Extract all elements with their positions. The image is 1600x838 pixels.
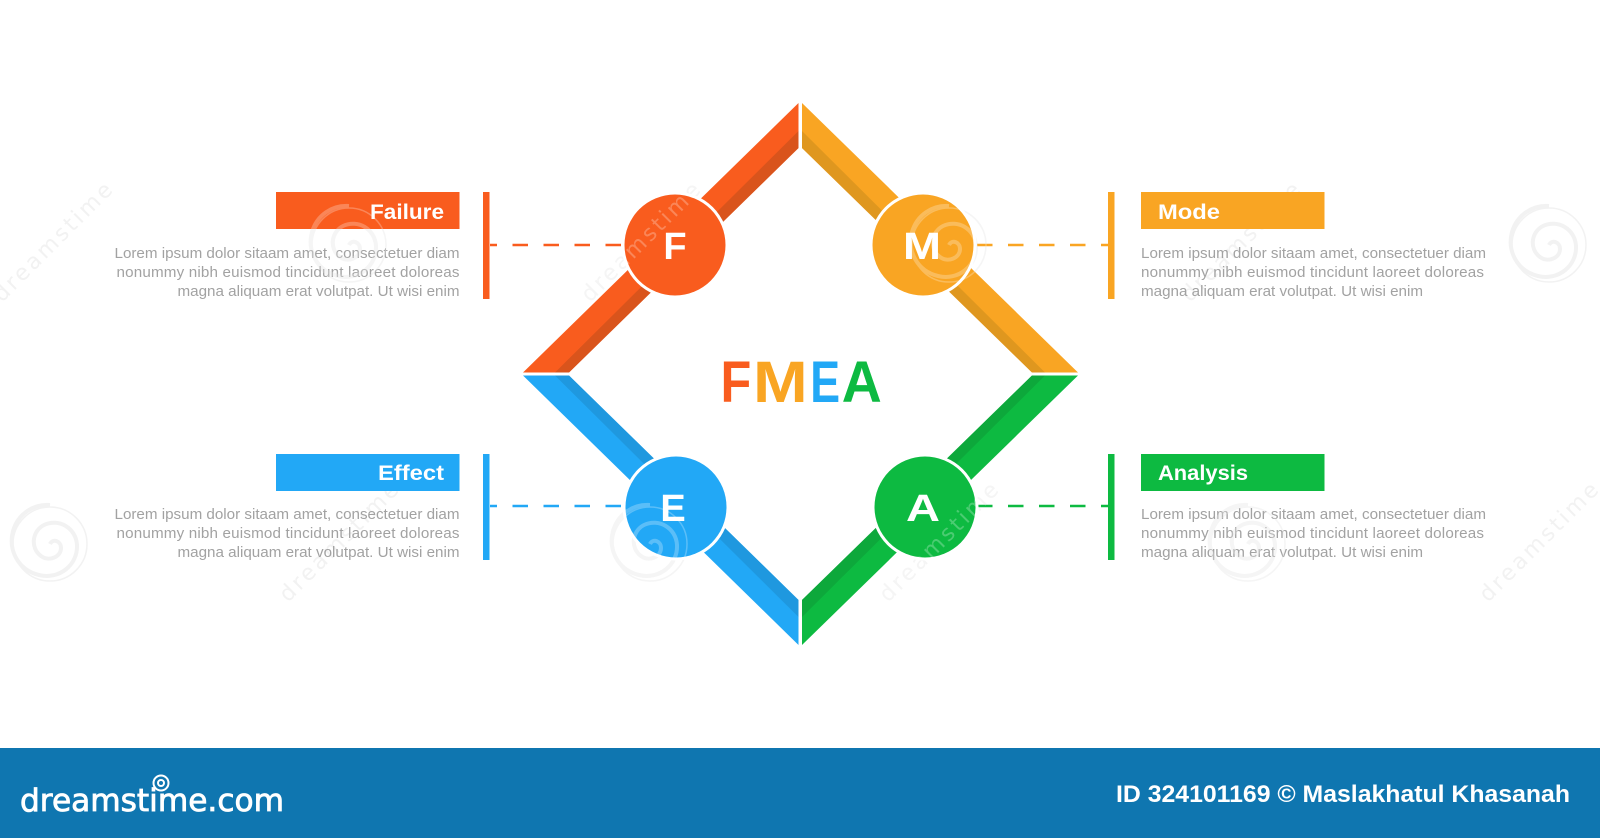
footer bar [0, 748, 1600, 838]
heading: analysis [1141, 454, 1324, 491]
title: FMEA: F [720, 350, 751, 415]
text: failure [114, 245, 460, 300]
text: effect: nonummy nibh euismod tincidunt laoreet doloreas [116, 525, 460, 542]
text: mode: nonummy nibh euismod tincidunt laoreet doloreas [1141, 264, 1484, 281]
icon: spiral [154, 776, 168, 790]
watermark layer over colour: dreamstime [875, 478, 1004, 607]
segment: mode [802, 103, 1078, 372]
circle: F: F [663, 226, 687, 268]
block: analysis [1141, 454, 1486, 561]
segment: failure [523, 103, 798, 372]
watermark layer over colour [311, 178, 1285, 607]
heading: effect [276, 454, 460, 491]
watermark layer on white: dreamstime [577, 178, 706, 307]
text: failure: nonummy nibh euismod tincidunt laoreet doloreas [116, 264, 460, 281]
connector: mode [976, 192, 1114, 299]
circle: M [870, 192, 976, 298]
circle: E: E [660, 488, 686, 530]
watermark layer on white: dreamstime [275, 478, 404, 607]
circle: A [872, 454, 978, 560]
text: analysis [1141, 506, 1486, 561]
text: failure: Lorem ipsum dolor sitaam amet, consectetuer diam [114, 245, 460, 262]
circle: F [622, 192, 728, 298]
watermark layer over colour: dreamstime [577, 178, 706, 307]
heading: mode: Mode [1158, 201, 1220, 224]
text: analysis: Lorem ipsum dolor sitaam amet, consectetuer diam [1141, 506, 1486, 523]
heading: failure [276, 192, 460, 229]
text: mode: magna aliquam erat volutpat. Ut wisi enim [1141, 283, 1423, 300]
text: mode [1141, 245, 1486, 300]
heading: mode [1141, 192, 1324, 229]
panel: diamond [523, 103, 1078, 645]
watermark layer on white: dreamstime [1177, 178, 1306, 307]
heading: failure: Failure [370, 201, 444, 224]
circle: M: M [903, 226, 941, 268]
title: FMEA [720, 350, 882, 415]
circle: E [622, 454, 730, 560]
connector: effect [483, 454, 625, 560]
text: mode: Lorem ipsum dolor sitaam amet, consectetuer diam [1141, 245, 1486, 262]
text: effect: Lorem ipsum dolor sitaam amet, consectetuer diam [114, 506, 460, 523]
logo: dreamstime.com: dreamstime.com [20, 783, 284, 819]
circle: A: A [906, 488, 940, 530]
title: FMEA: E [810, 350, 840, 415]
text: analysis: nonummy nibh euismod tincidunt laoreet doloreas [1141, 525, 1484, 542]
heading: analysis: Analysis [1158, 462, 1248, 485]
text: effect: magna aliquam erat volutpat. Ut wisi enim [178, 544, 460, 561]
block: mode [1141, 192, 1486, 300]
title: FMEA: M [753, 350, 808, 415]
segment: effect [523, 376, 798, 645]
title: FMEA: A [842, 350, 882, 415]
connector: failure [483, 192, 623, 299]
text: effect [114, 506, 460, 561]
segment: analysis [802, 376, 1078, 645]
text: analysis: magna aliquam erat volutpat. Ut wisi enim [1141, 544, 1423, 561]
block: failure [114, 192, 460, 300]
watermark layer on white [0, 178, 1600, 607]
text: failure: magna aliquam erat volutpat. Ut wisi enim [178, 283, 460, 300]
heading: effect: Effect [378, 462, 444, 485]
watermark layer on white: dreamstime [875, 478, 1004, 607]
block: effect [114, 454, 460, 561]
credit line: ID 324101169 © Maslakhatul Khasanah [1116, 781, 1570, 808]
connector: analysis [978, 454, 1114, 560]
